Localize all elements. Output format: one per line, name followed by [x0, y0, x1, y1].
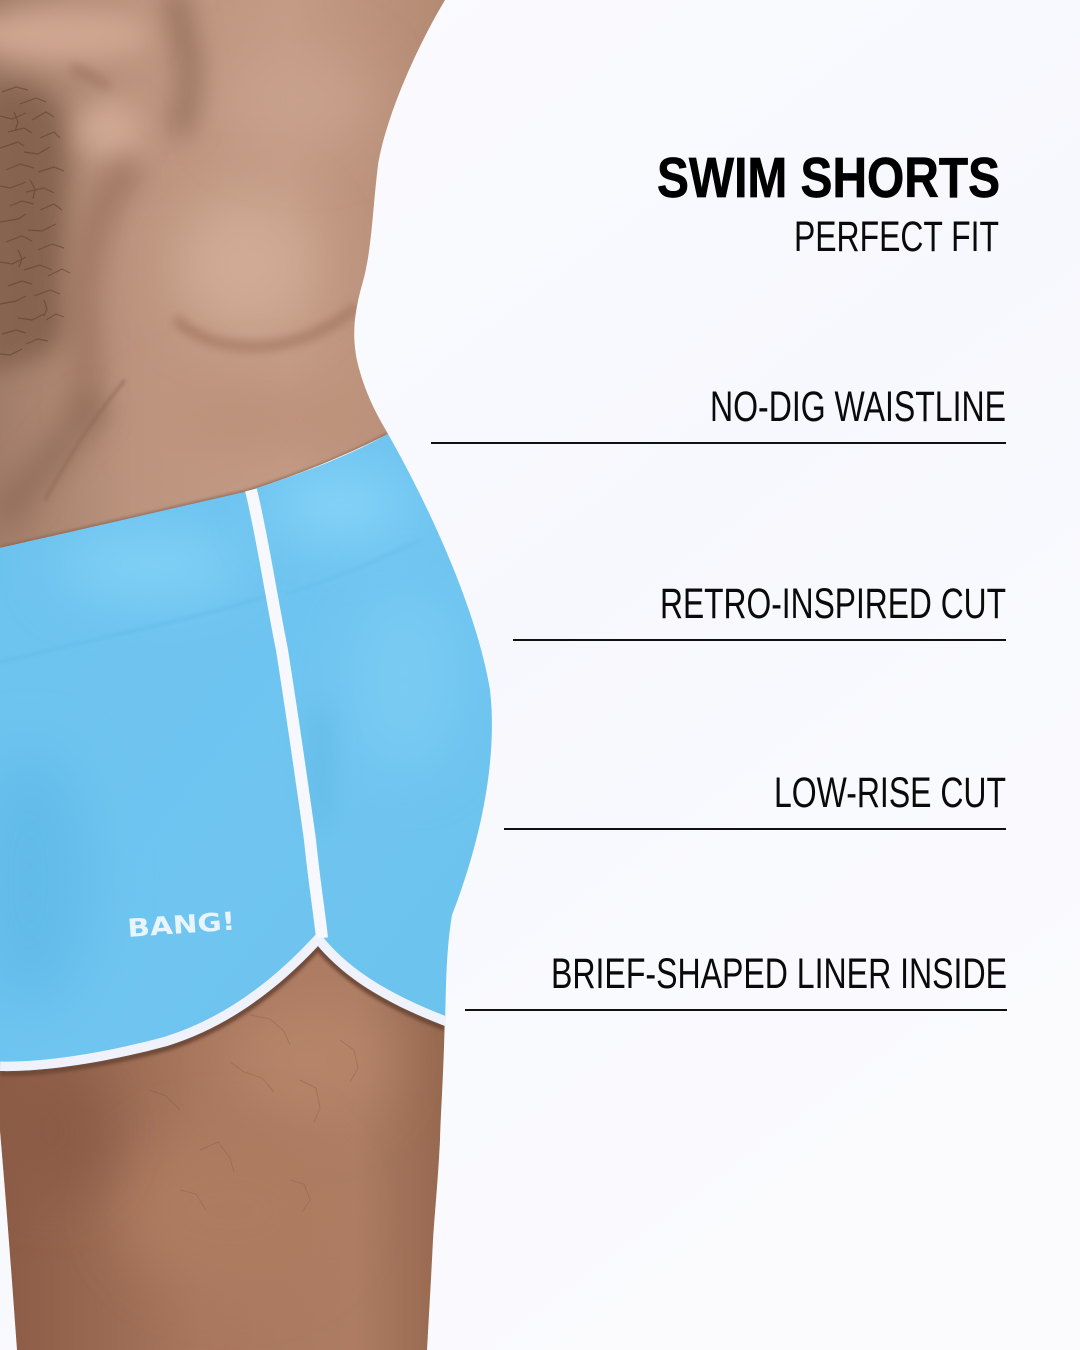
subtitle: PERFECT FIT: [794, 213, 999, 261]
chest crease: [176, 0, 191, 134]
oblique groove: [45, 380, 125, 500]
leg hair strokes: [150, 1015, 358, 1212]
chest hair shading: [0, 82, 70, 372]
rib shadow: [80, 165, 135, 420]
chest hair strokes: [0, 87, 70, 355]
photo: model thigh: [0, 925, 445, 1350]
white hem trim: [0, 946, 445, 1071]
title: SWIM SHORTS: [657, 146, 1000, 210]
brand logo: BANG!: [126, 907, 236, 943]
white side piping: [251, 490, 322, 938]
swim shorts: [0, 434, 492, 1071]
photo: model torso: [0, 0, 445, 548]
lower ab crease: [175, 306, 358, 347]
light ab highlight: [175, 195, 315, 335]
feature: low-rise cut: LOW-RISE CUT: [774, 769, 1006, 817]
